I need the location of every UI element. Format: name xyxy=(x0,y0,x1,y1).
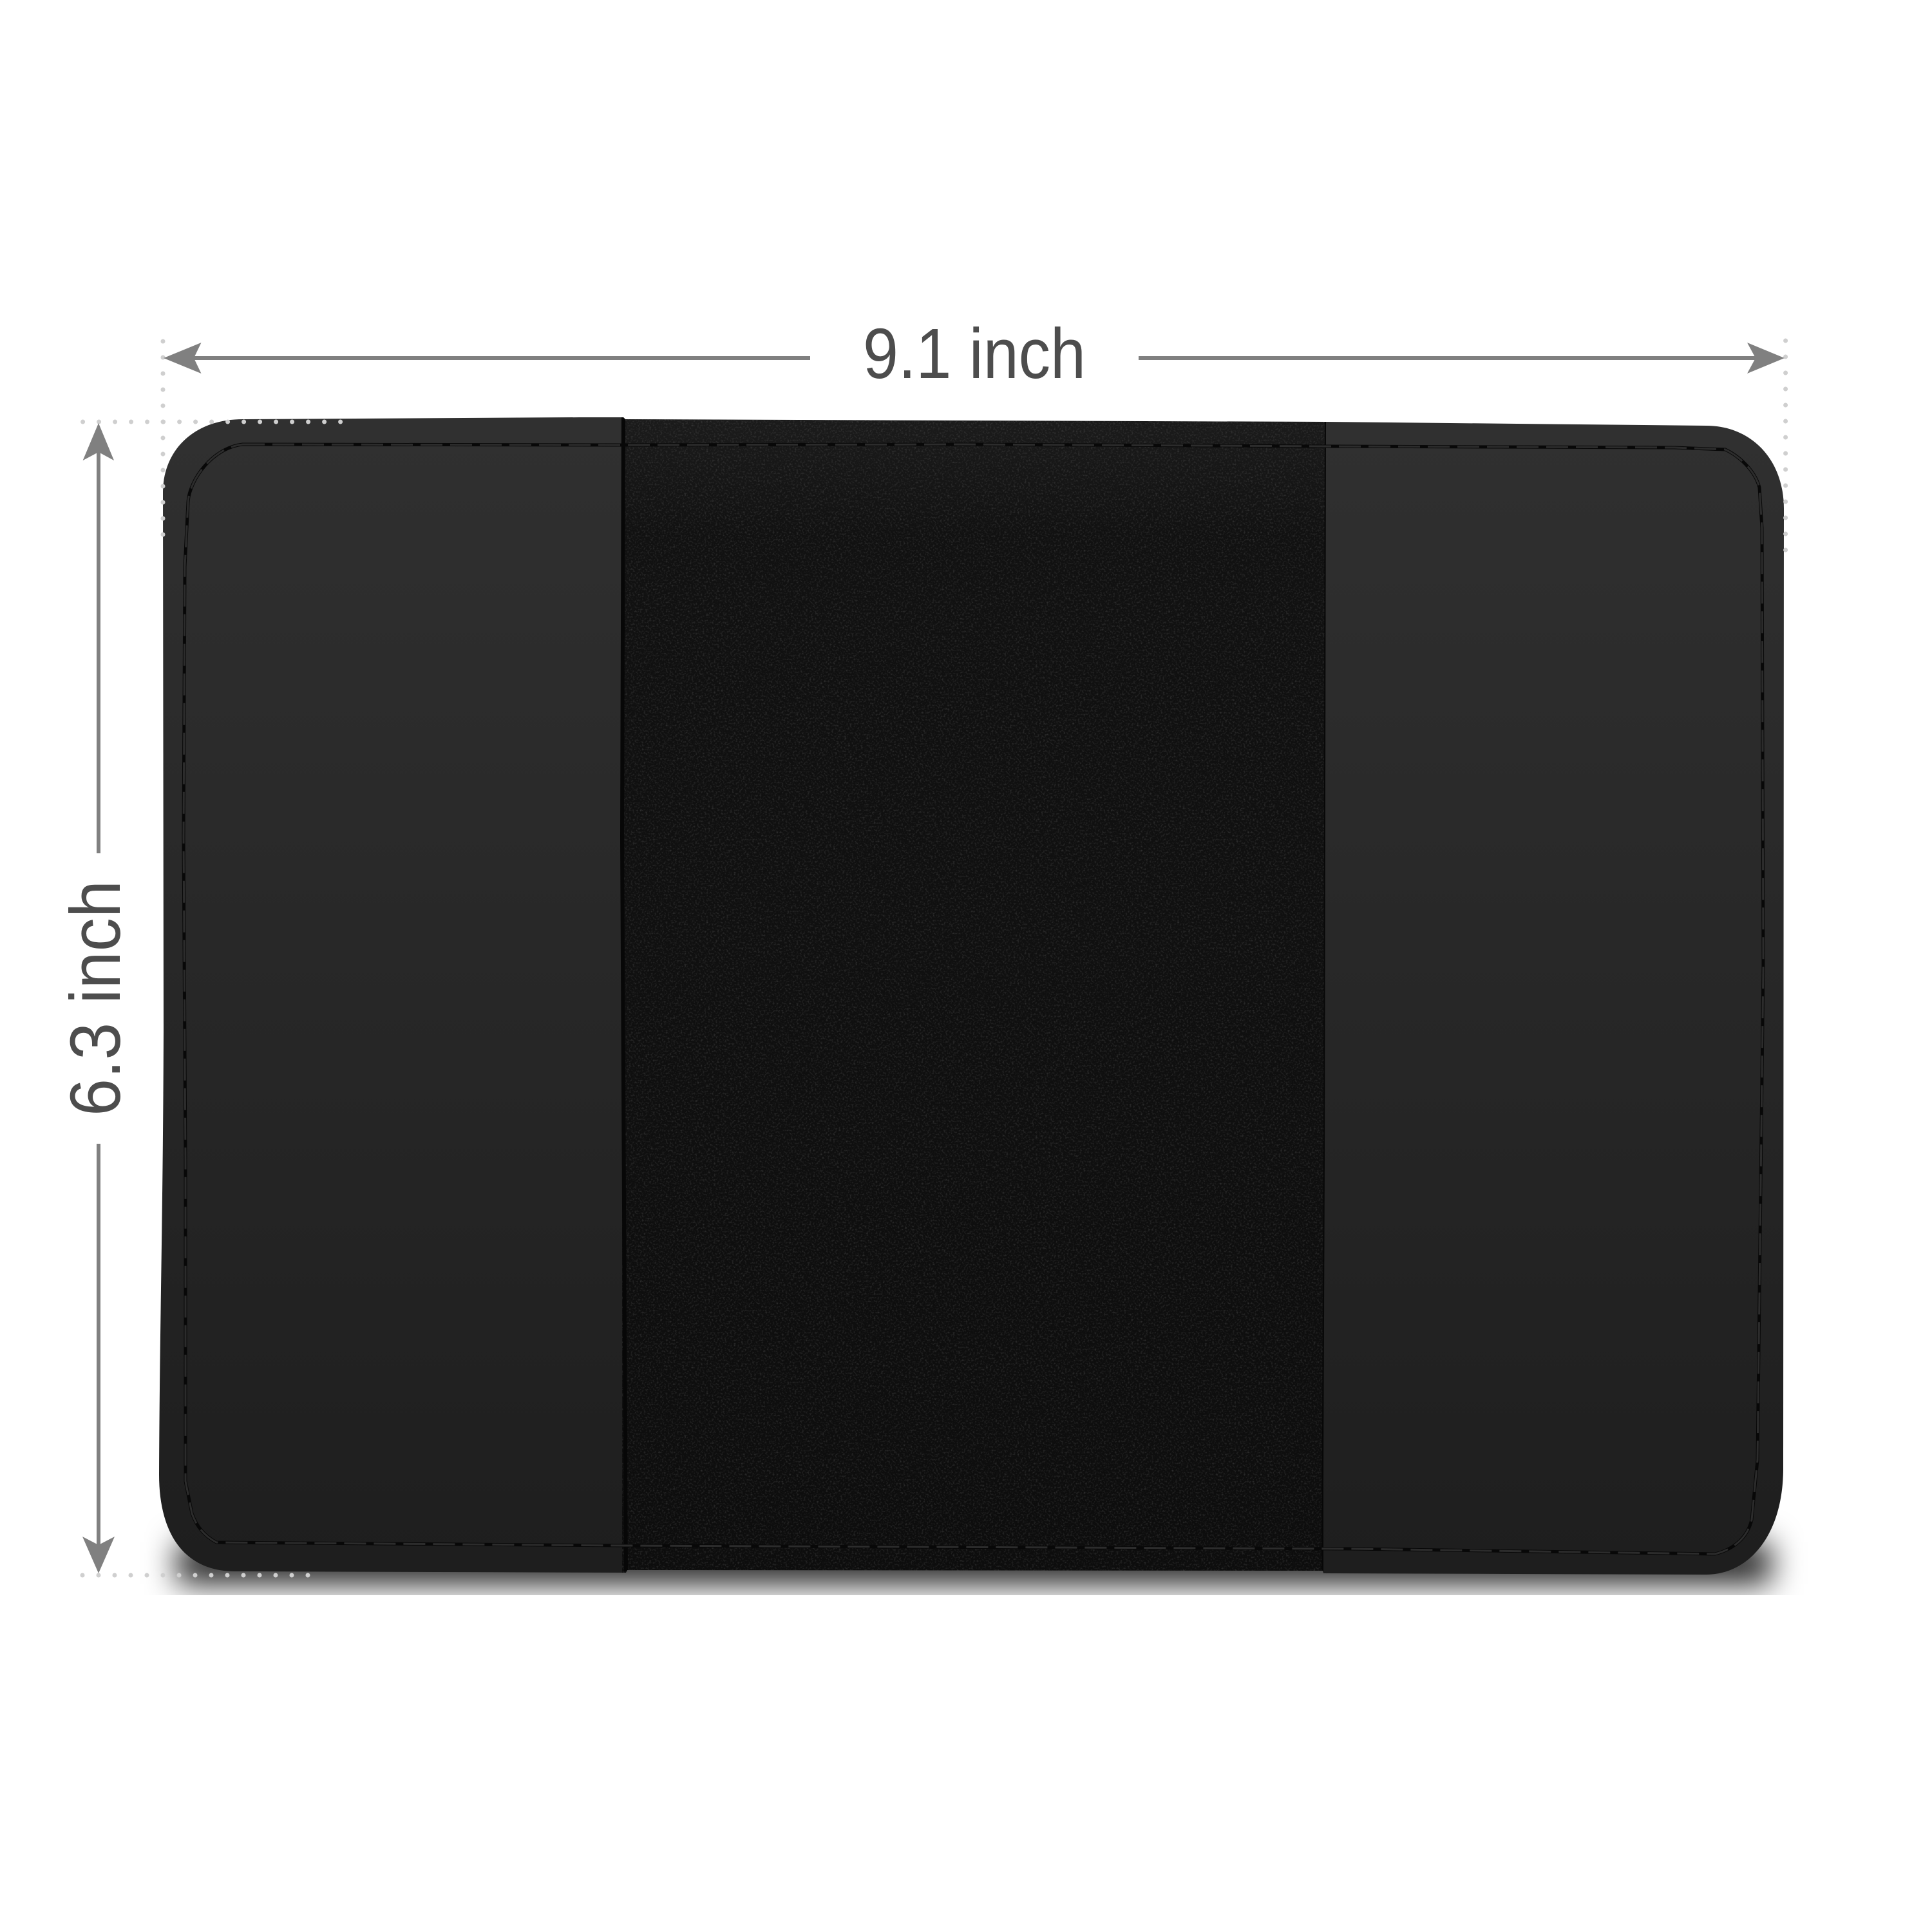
stitching around cover xyxy=(184,444,1763,1554)
drop shadow under cover xyxy=(177,1542,1771,1584)
dotted guide: left vertical xyxy=(161,341,165,536)
dotted guide: right vertical xyxy=(1783,341,1788,551)
dotted guide: top left horizontal xyxy=(83,420,341,424)
height dimension arrow, bottom part xyxy=(82,1144,115,1573)
passport cover xyxy=(155,412,1790,1578)
panel: right leather flap xyxy=(1323,412,1790,1578)
height dimension arrow, top part xyxy=(83,423,114,853)
panel: left leather flap xyxy=(155,412,626,1578)
width label: 9.1 inch xyxy=(863,314,1086,393)
width dimension arrow, right part xyxy=(1139,343,1785,374)
dotted guide: bottom left horizontal xyxy=(82,1573,309,1578)
panel: centre suede lining xyxy=(622,412,1327,1578)
width dimension arrow, left part xyxy=(164,343,810,374)
height label: 6.3 inch xyxy=(56,880,135,1116)
